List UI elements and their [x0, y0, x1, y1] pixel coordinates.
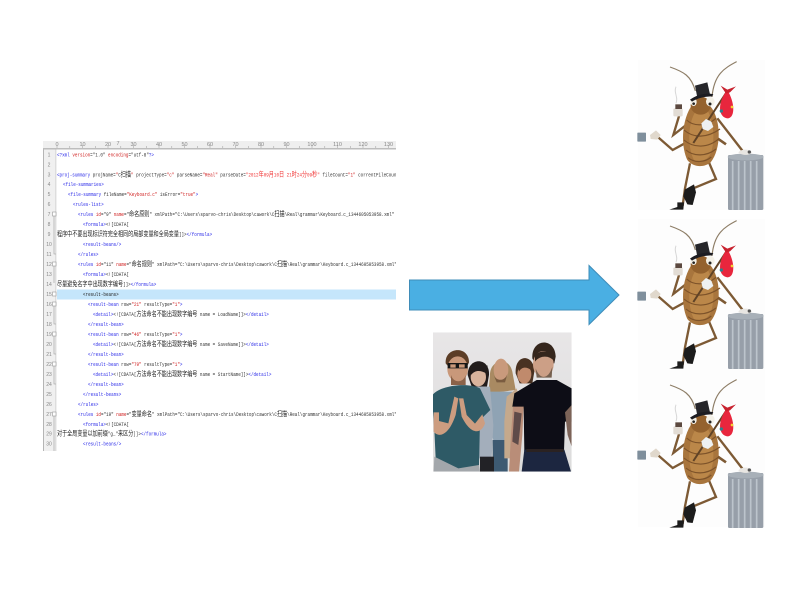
editor ruler: 80: [258, 142, 264, 148]
XML source text: </result-bean>: [88, 321, 124, 328]
editor ruler: 50: [181, 142, 188, 148]
XML source text: </result-beans>: [83, 391, 121, 398]
line numbers: 3: [48, 172, 51, 178]
line numbers: [46, 152, 52, 448]
line numbers: 23: [46, 372, 52, 378]
editor ruler: 130: [384, 142, 393, 148]
line numbers: 22: [46, 362, 52, 368]
line numbers: 25: [46, 392, 52, 398]
line numbers: 9: [48, 232, 51, 238]
XML source text: [57, 152, 399, 448]
editor ruler: 70: [232, 142, 239, 148]
line numbers: 7: [48, 212, 51, 218]
editor ruler: [43, 141, 396, 150]
XML source text: <detail><![CDATA[方法命名不能出现数字编号 name = SaveName]]></detail>: [93, 338, 269, 348]
line numbers: 16: [46, 302, 52, 308]
editor ruler: 120: [358, 142, 368, 148]
XML source text: </result-bean>: [88, 351, 124, 358]
XML source text: <rules id="11" name="命名规则" xmlPath="C:\Users\sparvo-chris\Desktop\cawork\C扫描\Real\grammar\Keyboard.c_1344605053958.xml": [78, 258, 397, 268]
editor ruler: 0: [55, 142, 59, 148]
line numbers: 8: [48, 222, 51, 228]
illustration: cockroach with hat and trash can (top): [637, 60, 765, 210]
editor ruler: 90: [283, 142, 290, 148]
line numbers: 21: [46, 352, 52, 358]
XML source text: 程序中不要出现标识符完全相同的局部变量和全局变量]]></formula>: [57, 228, 212, 238]
XML source text: <result-bean row="46" resultType="1">: [88, 331, 182, 338]
XML source text: <rules id="19" name="变量命名" xmlPath="C:\Users\sparvo-chris\Desktop\cawork\C扫描\Real\grammar\Keyboard.c_1344605053958.xml": [78, 408, 397, 418]
line numbers: 19: [46, 332, 52, 338]
XML source text: <detail><![CDATA[方法命名不能出现数字编号 name = LoadName]]></detail>: [93, 308, 269, 318]
editor ruler: 110: [333, 142, 342, 148]
XML source text: <proj-summary projName="C扫描" projectType="c" parseName="Real" parseDate="2012年09月10日 21时24分09秒" fileCount="1" correntFileCount: [57, 168, 399, 179]
line numbers: 1: [48, 152, 51, 158]
editor ruler: 40: [156, 142, 162, 148]
XML source text: <formula><![CDATA[: [83, 421, 129, 428]
XML source text: <result-beans/>: [83, 441, 121, 448]
line numbers: 29: [46, 432, 52, 438]
line numbers: 17: [46, 312, 52, 318]
line numbers: 15: [46, 292, 52, 298]
editor ruler: 100: [307, 142, 317, 148]
XML source text: <rules id="9" name="命名原则" xmlPath="C:\Users\sparvo-chris\Desktop\cawork\C扫描\Real\grammar\Keyboard.c_1344605053958.xml": [78, 208, 394, 218]
illustration: cockroach with hat and trash can (middle): [637, 219, 765, 378]
highlighted current line: [57, 290, 396, 300]
editor ruler: 7: [116, 141, 120, 147]
line numbers: 24: [46, 382, 52, 388]
XML source text: <result-bean row="79" resultType="1">: [88, 361, 182, 368]
line numbers: 18: [46, 322, 52, 328]
XML source text: <?xml version="1.0" encoding="utf-8"?>: [57, 152, 154, 159]
editor ruler: 20: [105, 142, 111, 148]
line numbers: 6: [48, 202, 51, 208]
person: back left with dark hair: [468, 361, 494, 472]
XML source text: <file-summaries>: [63, 182, 104, 188]
person: back right with beige shirt: [504, 358, 534, 458]
XML source text: 尽量避免名字中出现数字编号]]></formula>: [57, 278, 156, 288]
editor line number gutter: [43, 141, 57, 451]
code folding markers: [52, 212, 56, 451]
editor ruler: 30: [130, 142, 137, 148]
XML source text: <detail><![CDATA[方法命名不能出现数字编号 name = StartName]]></detail>: [93, 368, 271, 378]
XML source text: </rules>: [78, 252, 98, 258]
XML source text: <result-beans/>: [83, 242, 121, 248]
XML source text: 对于全局变量以加前缀"g_"来区分]]></formula>: [57, 428, 166, 438]
line numbers: 30: [46, 442, 52, 448]
line numbers: 11: [46, 252, 52, 258]
arrow: pointing right: [410, 266, 619, 324]
line numbers: 13: [46, 272, 52, 278]
XML source text: </rules>: [78, 401, 98, 408]
editor ruler: 10: [79, 142, 86, 148]
XML source text: <result-bean row="21" resultType="1">: [88, 301, 182, 308]
XML source text: </result-bean>: [88, 381, 124, 388]
editor ruler: 60: [207, 142, 213, 148]
line numbers: 26: [46, 402, 52, 408]
XML source text: <formula><![CDATA[: [83, 272, 129, 278]
XML source text: <rules-list>: [73, 202, 104, 208]
photo: band of five men: [433, 332, 572, 472]
line numbers: 4: [48, 182, 51, 188]
line numbers: 20: [46, 342, 52, 348]
line numbers: 10: [46, 242, 52, 248]
person: front left with glasses and teal shirt: [433, 350, 490, 472]
line numbers: 12: [46, 262, 52, 268]
XML source text: <formula><![CDATA[: [83, 222, 129, 228]
person: back centre with long hair: [488, 359, 516, 472]
line numbers: 5: [48, 192, 51, 198]
XML source text: <result-beans>: [83, 291, 119, 298]
line numbers: 14: [46, 282, 52, 288]
line numbers: 28: [46, 422, 52, 428]
illustration: cockroach with hat and trash can (bottom): [637, 378, 765, 528]
person: front right with black t-shirt: [509, 342, 572, 472]
line numbers: 27: [46, 412, 52, 418]
panel: XML code editor screenshot: [43, 141, 399, 451]
line numbers: 2: [48, 162, 51, 168]
XML source text: <file-summary fileName="Keyboard.c" isError="true">: [68, 192, 198, 198]
